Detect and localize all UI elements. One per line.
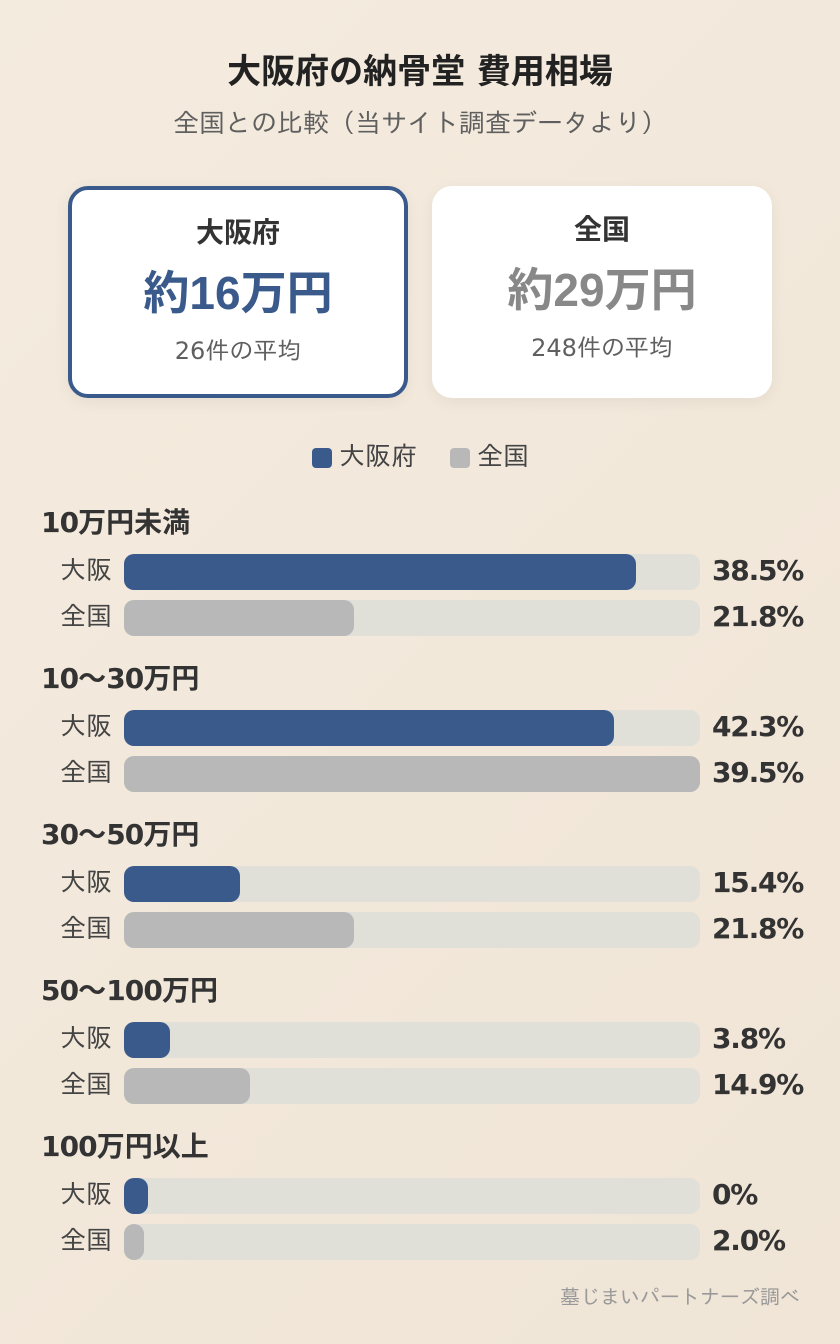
row: Osaka: 0% — [712, 1178, 757, 1211]
row: national — [60, 600, 804, 636]
panel: 300k to 500k yen — [41, 818, 804, 948]
row: Osaka — [60, 1022, 786, 1058]
row: national: 39.5% — [712, 756, 803, 789]
row: Osaka — [60, 554, 804, 590]
subtitle: 全国との比較（当サイト調査データより） — [173, 109, 667, 139]
row: national — [60, 912, 804, 948]
heading: 30〜50万円 — [41, 818, 199, 851]
legend label: national: 全国 — [477, 442, 529, 472]
heading: 100万円以上 — [41, 1130, 209, 1163]
row: Osaka: 3.8% — [712, 1022, 785, 1055]
row: national: 2.0% — [712, 1224, 785, 1257]
heading: 10〜30万円 — [41, 662, 199, 695]
row: national: 全国 — [60, 602, 112, 632]
title: 大阪府の納骨堂 費用相場 — [227, 52, 613, 92]
panel: under 100k yen — [41, 506, 804, 636]
row: Osaka: 42.3% — [712, 710, 803, 743]
panel: 100k to 300k yen — [41, 662, 804, 792]
row: Osaka: 大阪 — [60, 1180, 112, 1210]
row: Osaka: 大阪 — [60, 556, 112, 586]
row: Osaka — [60, 710, 804, 746]
row: national — [60, 756, 804, 792]
row: national: 全国 — [60, 1226, 112, 1256]
row: Osaka — [60, 1178, 758, 1214]
panel: Osaka average card — [68, 186, 408, 398]
row: Osaka: 15.4% — [712, 866, 803, 899]
row: Osaka: 大阪 — [60, 712, 112, 742]
row: national: 全国 — [60, 758, 112, 788]
heading: 50〜100万円 — [41, 974, 218, 1007]
row: Osaka: 38.5% — [712, 554, 803, 587]
legend label: Osaka: 大阪府 — [339, 442, 417, 472]
card label: 全国 — [574, 213, 630, 246]
card note: 26件の平均 — [175, 337, 301, 365]
row: national — [60, 1068, 804, 1104]
card note: 248件の平均 — [531, 334, 673, 362]
row: national: 21.8% — [712, 912, 803, 945]
card label: 大阪府 — [196, 216, 280, 249]
row: Osaka — [60, 866, 804, 902]
row: Osaka: 大阪 — [60, 868, 112, 898]
panel: 500k to 1M yen — [41, 974, 804, 1104]
panel: national average card — [432, 186, 772, 398]
heading: 10万円未満 — [41, 506, 190, 539]
row: national — [60, 1224, 786, 1260]
panel: over 1M yen — [41, 1130, 786, 1260]
row: Osaka: 大阪 — [60, 1024, 112, 1054]
row: national: 全国 — [60, 914, 112, 944]
row: national: 21.8% — [712, 600, 803, 633]
legend swatch: Osaka — [312, 448, 332, 468]
source note: 墓じまいパートナーズ調べ — [560, 1285, 800, 1309]
legend — [312, 442, 529, 472]
row: national: 全国 — [60, 1070, 112, 1100]
card value: 約29万円 — [507, 264, 697, 316]
row: national: 14.9% — [712, 1068, 803, 1101]
card value: 約16万円 — [143, 267, 333, 319]
legend swatch: national — [450, 448, 470, 468]
